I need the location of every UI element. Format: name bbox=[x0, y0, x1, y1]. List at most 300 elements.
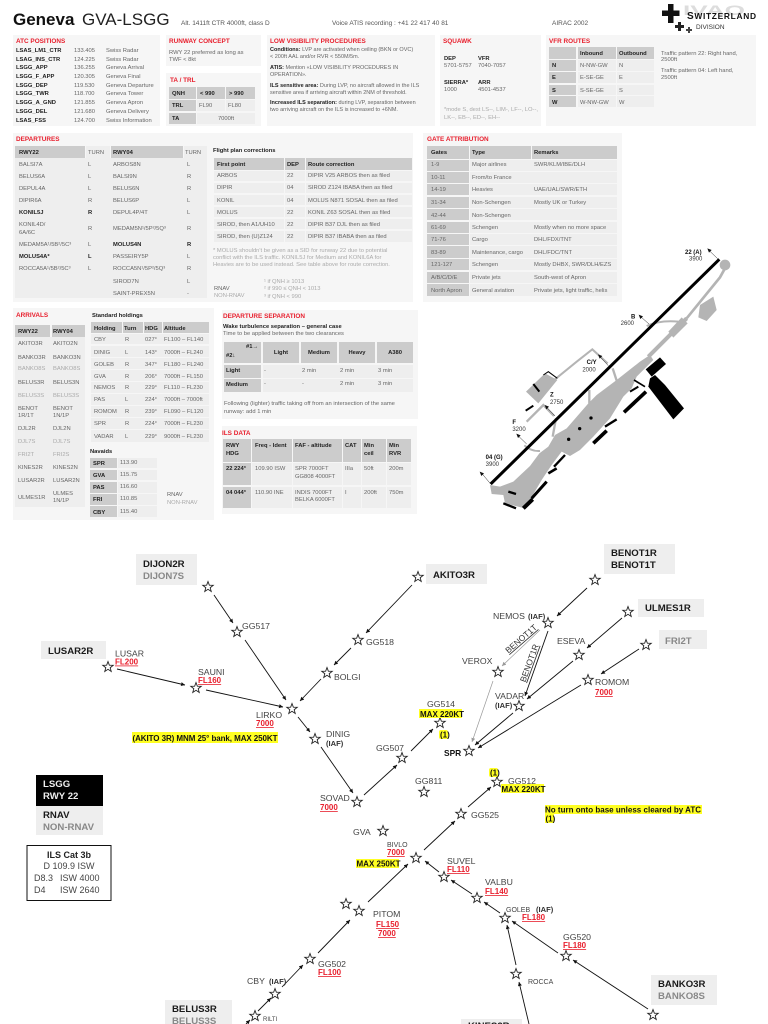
arrow: ULMES to ESEVA bbox=[587, 618, 622, 648]
panel: departure separation: Following (lighter) traffic taking off from an intersection of the same bbox=[224, 401, 395, 407]
panel: ATC positions: Geneva Apron bbox=[106, 100, 143, 106]
arrow: LUSAR to SAUNI bbox=[117, 669, 185, 685]
RNAV legend and QNH footnotes: ³ if QNH < 990 bbox=[264, 294, 301, 300]
callout: GG514 max speed: MAX 220KT bbox=[420, 710, 464, 719]
waypoint: GG518 bbox=[353, 634, 394, 647]
panel: gate attribution: Private jets, light traffic, helis bbox=[534, 288, 607, 294]
legend: LSGG RWY 22: NON-RNAV bbox=[43, 822, 95, 833]
RNAV legend and QNH footnotes: RNAV bbox=[214, 286, 230, 292]
legend: LSGG RWY 22 bbox=[36, 775, 103, 835]
panel: ILS data: 200ft bbox=[364, 490, 377, 496]
arrow: FRI to ROMOM bbox=[601, 649, 639, 674]
arrow: GG507 to GG514 bbox=[411, 729, 433, 751]
panel: low visibility procedures: OPERATION». bbox=[270, 72, 307, 78]
MOLUS note: * MOLUS shouldn't be given as a SID for runway 22 due to potential bbox=[213, 248, 387, 254]
panel: departure separation: Medium bbox=[308, 350, 330, 356]
taxiways and aprons bbox=[490, 260, 730, 508]
panel: squawk: *mode S, dest LS--, LIM-, LF--, LO--, bbox=[444, 107, 538, 113]
panel: VFR routes: W bbox=[619, 100, 625, 106]
waypoint: SUVEL bbox=[439, 856, 476, 881]
callout: no turn onto base bbox=[545, 805, 702, 824]
arrivals table: BELUS3S bbox=[18, 393, 44, 399]
panel: departure separation: Time to be applied between the two clearances bbox=[223, 331, 344, 337]
standard holdings table: R bbox=[125, 385, 129, 391]
departures table: DEPUL4A bbox=[19, 186, 46, 192]
arrow: VEROX to SPR bbox=[472, 681, 493, 742]
arrivals table: BANKO8S bbox=[53, 366, 81, 372]
panel: ATC positions: Swiss Radar bbox=[106, 48, 139, 54]
panel: runway concept: TWF < 8kt bbox=[169, 57, 196, 63]
panel: squawk: ARR bbox=[478, 80, 491, 86]
terminal buildings bbox=[503, 357, 684, 508]
panel: VFR routes: S-SE-GE bbox=[580, 88, 604, 94]
panel: ATC positions: LSAS_FSS bbox=[16, 118, 46, 124]
departures table: BELUS6P bbox=[113, 198, 139, 204]
waypoint: BIVLO bbox=[387, 842, 421, 862]
waypoint: RILTI bbox=[250, 1010, 278, 1023]
standard holdings table: DINIG bbox=[94, 350, 111, 356]
standard holdings table: 224° bbox=[145, 421, 157, 427]
standard holdings table: 7000ft – FL150 bbox=[164, 374, 203, 380]
arrivals table: AKITO3R bbox=[18, 341, 43, 347]
navaids table: 110.85 bbox=[120, 496, 137, 502]
flight plan corrections table: SIROD, then A1/UH10 bbox=[217, 222, 275, 228]
arrivals table: RWY22 bbox=[18, 329, 38, 335]
runway and intersection labels bbox=[486, 250, 703, 468]
panel: ATC positions bbox=[13, 35, 160, 126]
panel: VFR routes: S bbox=[552, 88, 556, 94]
route label: DIJON: DIJON7S bbox=[143, 571, 185, 582]
panel: TA / TRL: < 990 bbox=[200, 91, 215, 97]
panel: low visibility procedures: two arriving aircraft on the ILS is increased to +6NM. bbox=[270, 107, 398, 113]
route label: ULMES: ULMES1R bbox=[645, 603, 691, 614]
panel: VFR routes: S bbox=[619, 88, 623, 94]
flight plan corrections table: 04 bbox=[287, 185, 294, 191]
arrow: BIVLO to GG525 bbox=[424, 821, 455, 850]
title: Geneva bbox=[13, 10, 75, 29]
waypoint: GOLEB: FL180 bbox=[522, 913, 546, 922]
arrow: GG525 to GG512 bbox=[468, 787, 491, 807]
panel: ILS data: Min bbox=[389, 443, 399, 449]
panel: departure separation: Heavy bbox=[348, 350, 366, 356]
departures table: R bbox=[187, 266, 191, 272]
panel: squawk: DEP bbox=[444, 56, 456, 62]
waypoint: DINIG bbox=[310, 729, 350, 748]
flight plan corrections table bbox=[213, 148, 412, 242]
panel: gate attribution: Heavies bbox=[472, 187, 493, 193]
waypoint: PITOM: FL150 bbox=[376, 920, 400, 929]
panel: TA / TRL: TA / TRL bbox=[170, 77, 196, 84]
logo: IVAO Switzerland Division: DIVISION bbox=[696, 24, 725, 31]
arrivals table: LUSAR2R bbox=[18, 478, 45, 484]
panel: departure separation: 2 min bbox=[340, 381, 354, 387]
waypoint: BIVLO: BIVLO bbox=[387, 842, 408, 849]
navaids table: GVA bbox=[93, 473, 106, 479]
navaids table: 113.90 bbox=[120, 460, 137, 466]
flight plan corrections table: KONIL Z63 SOSAL then as filed bbox=[308, 210, 390, 216]
panel: ILS data: ILS DATA bbox=[222, 430, 251, 437]
arrow: KINES to ROCCA bbox=[519, 982, 529, 1024]
arrow: PITOM to BIVLO bbox=[368, 864, 408, 902]
panel: ATC positions: 118.700 bbox=[74, 91, 95, 97]
route label: BELUS: BELUS3R bbox=[172, 1004, 217, 1015]
panel: ILS data: BELKA 6000FT bbox=[295, 497, 335, 503]
legend: LSGG RWY 22: LSGG bbox=[43, 779, 70, 790]
standard holdings table: 239° bbox=[145, 409, 157, 415]
standard holdings table: 7000ft – FL230 bbox=[164, 421, 203, 427]
RNAV legend: RNAV bbox=[167, 492, 183, 498]
departures table: DIPIR6A bbox=[19, 198, 42, 204]
waypoint: GG518: GG518 bbox=[366, 637, 394, 647]
departures table: BALSI7A bbox=[19, 162, 43, 168]
arrow: BELUS to RILTI bbox=[246, 1020, 250, 1024]
waypoint: ROCCA: ROCCA bbox=[528, 979, 554, 986]
waypoint: SOVAD: 7000 bbox=[320, 803, 338, 812]
departures table: SIROD7N bbox=[113, 279, 139, 285]
arrivals table: FRI2T bbox=[18, 452, 35, 458]
panel: ATC positions: Swiss Radar bbox=[106, 57, 139, 63]
waypoint: SOVAD bbox=[320, 793, 362, 812]
waypoint: ROMOM: 7000 bbox=[595, 688, 613, 697]
legend: LSGG RWY 22: RWY 22 bbox=[43, 791, 78, 802]
panel: TA / TRL: > 990 bbox=[229, 91, 244, 97]
runway and intersection labels: Z bbox=[550, 393, 554, 399]
panel: VFR routes: 2500ft bbox=[661, 57, 678, 63]
flight plan corrections table: 22 bbox=[287, 210, 293, 216]
panel: ATC positions: 121.680 bbox=[74, 109, 95, 115]
departures table: R bbox=[187, 186, 191, 192]
standard holdings table: GVA bbox=[94, 374, 106, 380]
waypoint: GG811 bbox=[415, 776, 443, 796]
standard holdings table: 347° bbox=[145, 362, 157, 368]
panel: VFR routes: W-NW-GW bbox=[580, 100, 609, 106]
waypoint: SAUNI: FL160 bbox=[198, 676, 222, 685]
route label: ULMES bbox=[638, 599, 704, 617]
panel: gate attribution: DHL/FDX/TNT bbox=[534, 237, 572, 243]
waypoint: VALBU: VALBU bbox=[485, 877, 513, 887]
panel: arrivals: ARRIVALS bbox=[16, 312, 49, 319]
standard holdings table: ROMOM bbox=[94, 409, 117, 415]
panel: ILS data: ceil bbox=[364, 451, 374, 457]
panel: gate attribution: DHL/FDC/TNT bbox=[534, 250, 572, 256]
panel: VFR routes: N bbox=[619, 63, 623, 69]
arrivals table: BENOT bbox=[53, 406, 73, 412]
departures table: RWY04 bbox=[113, 150, 134, 156]
callout: AKITO 3R speed restriction: (AKITO 3R) MNM 25° bank, MAX 250KT bbox=[132, 734, 278, 743]
waypoint: VEROX: VEROX bbox=[462, 656, 493, 666]
panel: ATC positions: 124.700 bbox=[74, 118, 95, 124]
standard holdings table: Turn bbox=[124, 326, 137, 332]
panel: low visibility procedures: Conditions: LVP are activated when ceiling (BKN or OVC) bbox=[270, 47, 413, 53]
departures table: L bbox=[187, 198, 191, 204]
arrivals table: BANKO8S bbox=[18, 366, 46, 372]
header info: Voice ATIS recording : +41 22 417 40 81 bbox=[332, 20, 449, 27]
departures table: L bbox=[88, 254, 92, 260]
navaids table: SPR bbox=[93, 461, 106, 467]
waypoint: GG520: FL180 bbox=[563, 941, 587, 950]
panel: gate attribution: 42-44 bbox=[431, 213, 447, 219]
panel: squawk: LK--, EB--, ED--, EH-- bbox=[444, 115, 500, 121]
departures table: MOLUS4A* bbox=[19, 254, 50, 260]
panel: departures bbox=[13, 133, 413, 302]
flight plan corrections table: DIPIR bbox=[217, 185, 232, 191]
departures table: MEDAM5N¹/5P²/5Q³ bbox=[113, 226, 166, 232]
waypoint: GG502: GG502 bbox=[318, 959, 346, 969]
panel: ATC positions: LSAG_INS_CTR bbox=[16, 57, 61, 63]
departures table: L bbox=[187, 210, 191, 216]
panel: ILS data: 200m bbox=[389, 466, 404, 472]
panel: TA / TRL: TRL bbox=[172, 103, 184, 109]
standard holdings table: 7000ft – FL240 bbox=[164, 350, 203, 356]
waypoint: GG517: GG517 bbox=[242, 621, 270, 631]
panel: ILS data: 04 044° bbox=[226, 490, 247, 496]
ILS Cat 3b box: ISW 2640 bbox=[60, 885, 100, 895]
callout: BIVLO max speed: MAX 250KT bbox=[356, 860, 401, 868]
departures table: RWY22 bbox=[19, 150, 39, 156]
route label: KINES bbox=[461, 1019, 522, 1024]
arrow: ROMOM to SPR bbox=[478, 685, 581, 748]
arrow: ROCCA to GOLEB bbox=[507, 925, 516, 965]
panel: ILS data: 110.90 INE bbox=[255, 490, 284, 496]
standard holdings table: 9000ft – FL230 bbox=[164, 434, 203, 440]
standard holdings table: R bbox=[125, 362, 129, 368]
waypoint: CBY bbox=[247, 976, 287, 998]
panel: gate attribution: 10-11 bbox=[431, 175, 445, 181]
waypoint: GG520: GG520 bbox=[563, 932, 591, 942]
departures table: L bbox=[88, 242, 92, 248]
arrivals table: DJL7S bbox=[18, 439, 36, 445]
panel: departure separation: Wake turbulence separation – general case bbox=[223, 324, 342, 330]
panel: departure separation: 3 min bbox=[378, 381, 392, 387]
waypoint: GVA bbox=[353, 826, 388, 837]
flight plan corrections table: MOLUS bbox=[217, 210, 238, 216]
flight plan corrections table: ARBOS bbox=[217, 173, 237, 179]
panel: VFR routes: N-NW-GW bbox=[580, 63, 608, 69]
title: GVA-LSGG bbox=[82, 10, 170, 29]
MOLUS note: Heavies are to be used instead. See table above for route correction. bbox=[213, 262, 390, 268]
panel: departure separation: #1→ bbox=[246, 344, 258, 350]
panel: gate attribution: 121-127 bbox=[431, 262, 452, 268]
departures table: BELUS6N bbox=[113, 186, 139, 192]
panel: gate attribution: General aviation bbox=[472, 288, 514, 294]
panel: ATC positions: LSGG_DEP bbox=[16, 83, 48, 89]
panel: gate attribution: Major airlines bbox=[472, 162, 507, 168]
waypoint: GG502: FL100 bbox=[318, 968, 342, 977]
panel: ATC positions: 121.855 bbox=[74, 100, 95, 106]
panel: TA / TRL: FL90 bbox=[199, 103, 212, 109]
arrow: BOLGI to LIRKO bbox=[300, 679, 321, 701]
runway and intersection labels: F bbox=[512, 420, 516, 426]
arrivals table: KINES2N bbox=[53, 465, 78, 471]
flight plan corrections table: 22 bbox=[287, 173, 293, 179]
arrivals table: FRI2S bbox=[53, 452, 70, 458]
arrow: DINIG to SOVAD bbox=[321, 747, 353, 793]
runway and intersection labels: 3900 bbox=[689, 257, 703, 263]
standard holdings table: Holding bbox=[94, 326, 116, 332]
departures table: SAINT-PREX5N bbox=[113, 291, 155, 297]
departures table: ROCCA5N¹/5P²/5Q³ bbox=[113, 266, 165, 272]
route name on line: BENOT1R: BENOT1R bbox=[518, 643, 541, 683]
flight plan corrections table: 04 bbox=[287, 198, 294, 204]
RNAV legend bbox=[167, 492, 198, 506]
departures table: R bbox=[187, 242, 192, 248]
panel: runway concept: RUNWAY CONCEPT bbox=[169, 38, 230, 45]
departures table: L bbox=[88, 162, 92, 168]
panel: ILS data: Min bbox=[364, 443, 374, 449]
arrow: GG502 to PITOM bbox=[318, 920, 350, 953]
flight plan corrections table: 22 bbox=[287, 222, 293, 228]
arrivals table: DJL7S bbox=[53, 439, 71, 445]
flight plan corrections table: SIROD, then (U)Z124 bbox=[217, 234, 274, 240]
panel: arrivals bbox=[13, 308, 214, 520]
standard holdings table: 143° bbox=[145, 350, 157, 356]
ILS Cat 3b box bbox=[27, 846, 111, 900]
runway and intersection labels: 22 (A) bbox=[685, 250, 702, 256]
panel: departure separation: 2 min bbox=[302, 368, 316, 374]
MOLUS note bbox=[213, 248, 390, 268]
panel: TA / TRL: QNH bbox=[172, 91, 185, 97]
panel: low visibility procedures bbox=[267, 35, 435, 126]
departures table: TURN bbox=[185, 150, 201, 156]
panel: runway concept: RWY 22 preferred as long as bbox=[169, 50, 244, 56]
waypoint: GG502 bbox=[305, 954, 346, 977]
arrivals table: RWY04 bbox=[53, 329, 74, 335]
panel: gate attribution: Mostly UK or Turkey bbox=[534, 200, 586, 206]
arrivals table: LUSAR2N bbox=[53, 478, 80, 484]
panel: ATC positions: Swiss Information bbox=[106, 118, 152, 124]
header info bbox=[181, 20, 589, 27]
arrivals table: BELUS3N bbox=[53, 380, 79, 386]
ILS Cat 3b box: ISW 4000 bbox=[60, 873, 100, 883]
route name on line: BENOT1T: BENOT1T bbox=[503, 622, 539, 655]
panel: gate attribution: From/to France bbox=[472, 175, 512, 181]
waypoint: LIRKO: 7000 bbox=[256, 719, 274, 728]
panel: VFR routes: E bbox=[552, 75, 556, 81]
panel: departure separation: 2 min bbox=[340, 368, 354, 374]
waypoint: VADAR: (IAF) bbox=[495, 701, 513, 710]
panel: gate attribution: Private jets bbox=[472, 275, 501, 281]
callout: GG512 max speed: MAX 220KT bbox=[502, 785, 546, 794]
panel: gate attribution: Non-Schengen bbox=[472, 200, 511, 206]
standard holdings table: GOLEB bbox=[94, 362, 114, 368]
RNAV legend and QNH footnotes: ¹ if QNH ≥ 1013 bbox=[264, 279, 304, 285]
panel: squawk: 7040-7057 bbox=[478, 63, 506, 69]
waypoint: GG507 bbox=[376, 743, 407, 762]
waypoint: GG512 bbox=[492, 776, 536, 786]
panel: departure separation bbox=[222, 310, 418, 419]
panel: VFR routes: 2500ft bbox=[661, 75, 678, 81]
departures table: L bbox=[187, 279, 191, 285]
panel: ILS data: GG808 4000FT bbox=[295, 474, 336, 480]
waypoint: GVA: GVA bbox=[353, 827, 371, 837]
waypoint: NEMOS: (IAF) bbox=[528, 612, 546, 621]
route label: DIJON bbox=[136, 554, 197, 585]
arrow: GG518 to BOLGI bbox=[334, 648, 351, 665]
panel: ATC positions: LSAS_LM1_CTR bbox=[16, 48, 62, 54]
panel: squawk: SQUAWK bbox=[443, 38, 472, 45]
flight plan corrections table: Route correction bbox=[308, 162, 355, 168]
RNAV legend and QNH footnotes bbox=[214, 279, 321, 300]
panel: TA / TRL: TA bbox=[172, 116, 180, 122]
waypoint: GG811: GG811 bbox=[415, 776, 443, 786]
waypoint: GG507: GG507 bbox=[376, 743, 404, 753]
entry point stars bbox=[203, 572, 658, 1019]
threshold direction ticks bbox=[480, 248, 718, 484]
flight plan corrections table: Flight plan corrections bbox=[213, 148, 275, 154]
panel: VFR routes: E bbox=[619, 75, 623, 81]
panel: gate attribution: Gates bbox=[431, 150, 447, 156]
waypoint: GG517 bbox=[232, 621, 270, 636]
standard holdings table: PAS bbox=[94, 397, 105, 403]
departures table: L bbox=[187, 254, 191, 260]
waypoint: SOVAD: SOVAD bbox=[320, 793, 350, 803]
waypoint: GG525 bbox=[456, 808, 499, 820]
ILS Cat 3b box: D 109.9 ISW bbox=[43, 861, 95, 871]
panel: ILS data: I bbox=[345, 490, 347, 496]
panel: gate attribution: 14-19 bbox=[431, 187, 446, 193]
RNAV legend and QNH footnotes: NON-RNAV bbox=[214, 293, 245, 299]
arrow: GOLEB to VALBU bbox=[484, 902, 500, 913]
standard holdings table: 224° bbox=[145, 397, 157, 403]
standard holdings table: 229° bbox=[145, 434, 157, 440]
standard holdings table: HDG bbox=[145, 326, 158, 332]
arrivals table: BELUS3R bbox=[18, 380, 44, 386]
panel: VFR routes: Outbound bbox=[619, 51, 647, 57]
arrow: RILTI to CBY bbox=[258, 998, 271, 1011]
panel: gate attribution: 61-69 bbox=[431, 225, 446, 231]
callout: GG512 note 1: (1) bbox=[490, 768, 500, 778]
panel: ILS data: HDG bbox=[226, 451, 239, 457]
navaids table: PAS bbox=[93, 485, 105, 491]
departures table: - bbox=[187, 291, 189, 297]
panel: departures: DEPARTURES bbox=[16, 136, 60, 143]
standard holdings table: L bbox=[125, 350, 129, 356]
waypoint: SPR bbox=[444, 746, 474, 758]
panel: low visibility procedures: ATIS: Mention «LOW VISIBILITY PROCEDURES IN bbox=[270, 65, 398, 71]
waypoint: GG514 bbox=[427, 699, 455, 727]
waypoint: VADAR bbox=[495, 691, 524, 710]
flight plan corrections table: SIROD Z124 IBABA then as filed bbox=[308, 185, 392, 191]
departures table: PASSEIRY5P bbox=[113, 254, 149, 260]
arrivals table: 1R/1T bbox=[18, 413, 34, 419]
waypoint: BOLGI bbox=[322, 668, 361, 682]
waypoint: DINIG: (IAF) bbox=[326, 739, 344, 748]
flight plan corrections table: MOLUS N871 SOSAL then as filed bbox=[308, 198, 398, 204]
departures table: R bbox=[187, 226, 191, 232]
waypoint: GOLEB: GOLEB bbox=[506, 907, 530, 914]
departures table: BELUS6A bbox=[19, 174, 45, 180]
panel: ATC positions: 119.530 bbox=[74, 83, 95, 89]
route label: BENOT: BENOT1T bbox=[611, 560, 656, 571]
departures table: KONIL4D/ bbox=[19, 222, 46, 228]
route label: FRI bbox=[659, 630, 707, 649]
arrivals table: BELUS3S bbox=[53, 393, 79, 399]
flight plan corrections table: KONIL bbox=[217, 198, 235, 204]
arrow: SUVEL to BIVLO bbox=[425, 861, 439, 872]
panel: departure separation: - bbox=[302, 381, 304, 387]
panel: gate attribution: UAE/UAL/SWR/ETH bbox=[534, 187, 587, 193]
arrow: VALBU to SUVEL bbox=[451, 880, 472, 894]
departures table: R bbox=[88, 226, 92, 232]
panel: squawk: 5701-5757 bbox=[444, 63, 472, 69]
departures table: BALSI9N bbox=[113, 174, 137, 180]
runway and intersection labels: 2750 bbox=[550, 400, 564, 406]
runway and intersection labels: 04 (G) bbox=[486, 455, 503, 461]
departures table: L bbox=[88, 186, 92, 192]
panel: squawk bbox=[440, 35, 541, 126]
panel: gate attribution: 1-9 bbox=[431, 162, 439, 168]
standard holdings table: FL100 – FL140 bbox=[164, 337, 203, 343]
